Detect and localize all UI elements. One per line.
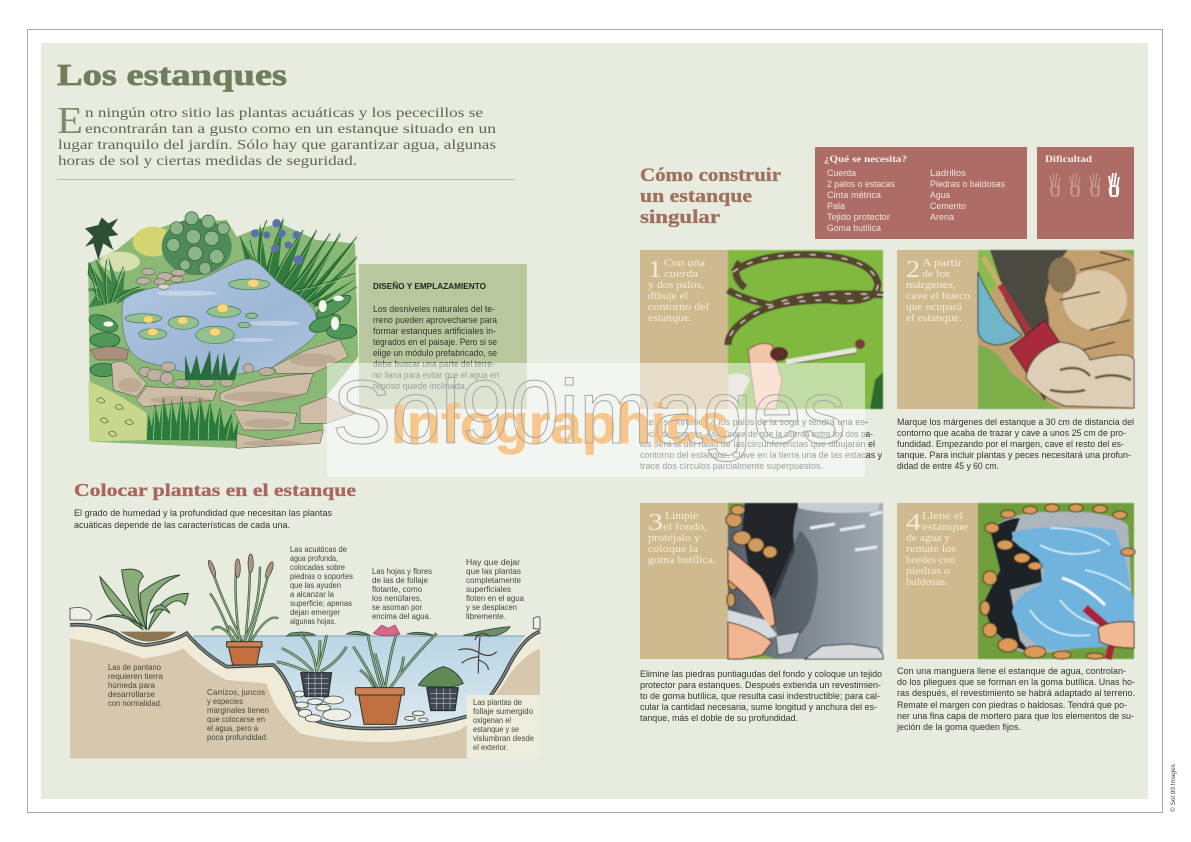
step 3 caption: tanque, más el doble de su profundidad. bbox=[640, 713, 798, 723]
label: superficiales: floten en el agua bbox=[466, 594, 525, 603]
label: aguas profundas: piedras o soportes bbox=[290, 572, 353, 581]
step 1 caption: contorno del estanque. Clave en la tierra una de las estacas y bbox=[640, 450, 882, 460]
panel: diseño y emplazamiento: formar estanques artificiales in- bbox=[373, 326, 496, 336]
plant: floating roots bbox=[458, 633, 497, 673]
panel: diseño y emplazamiento: tegrados en el paisaje. Pero si se bbox=[373, 337, 497, 347]
step 1 text: estanque. bbox=[648, 313, 692, 324]
rocks bbox=[70, 607, 540, 722]
panel: dificultad: Dificultad bbox=[1045, 155, 1093, 165]
step 1 text: dibuje el bbox=[648, 291, 688, 302]
illustration: marking the outline bbox=[728, 250, 883, 409]
label: superficiales: superficiales bbox=[466, 585, 511, 594]
step 3 caption bbox=[640, 669, 882, 723]
step 2 text: 2 bbox=[906, 257, 920, 283]
illustration: digging bbox=[978, 250, 1134, 409]
water bbox=[122, 259, 318, 375]
plant: big pot bbox=[353, 633, 437, 724]
credit: © Sol 90 Images bbox=[1170, 764, 1177, 812]
illustration: garden pond bbox=[85, 212, 358, 448]
panel: qué se necesita: Cuerda bbox=[827, 168, 856, 178]
step 1 text: Con una bbox=[664, 258, 706, 269]
step 2 text: márgenes, bbox=[906, 280, 956, 291]
label: pantano: Las de pantano bbox=[108, 663, 162, 672]
panel: qué se necesita: Tejido protector bbox=[827, 212, 890, 222]
label: marginales: marginales tienen bbox=[207, 706, 269, 715]
panel: qué se necesita bbox=[815, 147, 1027, 239]
step 1 caption: pecie de compás. Asegúrese de que la cuerda entre los dos pa- bbox=[640, 429, 873, 439]
step 2 text: cave el hueco bbox=[906, 291, 970, 302]
panel: qué se necesita: Agua bbox=[930, 190, 950, 200]
text: colocar plantas intro: El grado de humedad y la profundidad que necesitan las plantas bbox=[74, 508, 332, 518]
step 3 caption: protector para estanques. Después extienda un revestimien- bbox=[640, 680, 881, 690]
text: colocar plantas intro: acuáticas depende de las características de cada una. bbox=[74, 520, 290, 530]
label: pantano: húmeda para bbox=[108, 681, 156, 690]
step 4 caption bbox=[896, 666, 1135, 732]
step 4 text: remate los bbox=[906, 544, 956, 555]
panel: diseño y emplazamiento: Los desniveles naturales del te- bbox=[373, 304, 495, 314]
label: follaje flotante: de las de follaje bbox=[372, 576, 429, 585]
yellow shrub bbox=[88, 382, 147, 442]
step 4 caption: ner una fina capa de mortero para que los elementos de su- bbox=[897, 711, 1134, 721]
step 3 text bbox=[648, 510, 716, 566]
panel: qué se necesita: Cemento bbox=[930, 201, 966, 211]
label: sumergido: follaje sumergido bbox=[473, 707, 534, 716]
label: marginales: Carrizos, juncos bbox=[207, 688, 265, 697]
step 4 caption: jeción de la goma queden fijos. bbox=[896, 722, 1021, 732]
panel: qué se necesita: Pala bbox=[827, 201, 845, 211]
intro text: lugar tranquilo del jardín. Sólo hay que garantizar agua, algunas bbox=[58, 138, 496, 153]
step 2 text: el estanque. bbox=[906, 313, 962, 324]
calla leaves bbox=[87, 291, 357, 377]
label: pantano: con normalidad. bbox=[108, 699, 162, 708]
label: aguas profundas bbox=[290, 545, 353, 626]
step 1 text bbox=[648, 257, 709, 324]
label: aguas profundas: superficie; apenas bbox=[290, 599, 352, 608]
heading: cómo construir bbox=[640, 166, 781, 228]
dark palm bbox=[85, 217, 118, 260]
step 4 text: baldosas. bbox=[906, 577, 948, 588]
step 3 text: protéjalo y bbox=[648, 533, 700, 544]
label: pantano: desarrollarse bbox=[108, 690, 156, 699]
label: superficiales bbox=[466, 558, 525, 621]
step 2 text: A partir bbox=[922, 258, 963, 269]
step 3 text: goma butílica. bbox=[648, 555, 716, 566]
intro text: E bbox=[57, 100, 83, 142]
reeds bbox=[185, 350, 240, 380]
cross-section of pond bbox=[70, 554, 540, 758]
intro text: horas de sol y ciertas medidas de seguridad. bbox=[58, 154, 357, 169]
label: marginales: poca profundidad. bbox=[207, 733, 268, 742]
step 2 bbox=[897, 250, 1134, 471]
label: follaje flotante: se asoman por bbox=[372, 603, 422, 612]
plant: swamp bbox=[97, 569, 188, 630]
panel: diseño y emplazamiento: elige un módulo prefabricado, se bbox=[373, 348, 497, 358]
text: colocar plantas intro bbox=[74, 508, 332, 530]
grass clumps bbox=[88, 257, 147, 307]
step 4 caption: do los pliegues que se forman en la goma butílica. Unas ho- bbox=[897, 677, 1135, 687]
step 2 caption: fundidad. Empezando por el margen, cave el resto del es- bbox=[897, 439, 1124, 449]
heading: cómo construir: singular bbox=[640, 208, 720, 228]
label: sumergido: oxigenan el bbox=[473, 716, 511, 725]
step 3 text: 3 bbox=[648, 510, 663, 536]
label: superficiales: Hay que dejar bbox=[466, 558, 520, 567]
heading: cómo construir: Cómo construir bbox=[640, 166, 781, 186]
lily pads bbox=[125, 279, 270, 344]
step 3 caption: Elimine las piedras puntiagudas del fondo y coloque un tejido bbox=[640, 669, 882, 679]
label: follaje flotante: encima del agua. bbox=[372, 612, 431, 621]
illustration: laying the liner bbox=[726, 503, 883, 659]
panel: qué se necesita: Arena bbox=[930, 212, 954, 222]
step 2 caption: didad de entre 45 y 60 cm. bbox=[897, 461, 999, 471]
label: follaje flotante: flotante, como bbox=[372, 585, 423, 594]
label: follaje flotante: los nenúfares, bbox=[372, 594, 422, 603]
heading: colocar plantas: Colocar plantas en el estanque bbox=[74, 480, 356, 500]
step 2 caption: Marque los márgenes del estanque a 30 cm de distancia del bbox=[897, 417, 1134, 427]
label: pantano: requieren tierra bbox=[108, 672, 164, 681]
label: superficiales: que las plantas bbox=[466, 567, 521, 576]
panel: diseño y emplazamiento: debe buscar una parte del terre- bbox=[373, 359, 495, 369]
step 2 text: de los bbox=[922, 269, 950, 280]
label: aguas profundas: Las acuáticas de bbox=[290, 545, 348, 554]
lining bbox=[70, 625, 540, 742]
panel: diseño y emplazamiento: DISEÑO Y EMPLAZAMIENTO bbox=[373, 281, 486, 291]
step 3 text: el fondo, bbox=[663, 522, 707, 533]
step 4 text bbox=[906, 510, 969, 588]
panel: diseño y emplazamiento: reposo quede inclinada. bbox=[373, 381, 467, 391]
panel: qué se necesita: Piedras o baldosas bbox=[930, 179, 1005, 189]
label: aguas profundas: dejan emerger bbox=[290, 608, 340, 617]
label: marginales bbox=[207, 688, 269, 742]
step 1 caption bbox=[640, 417, 882, 471]
step 4 bbox=[896, 503, 1135, 732]
step 4 text: estanque bbox=[922, 522, 969, 533]
panel: diseño y emplazamiento bbox=[359, 264, 527, 409]
step 2 caption bbox=[897, 417, 1134, 471]
plant: basket right bbox=[418, 667, 463, 711]
intro text: encontrarán tan a gusto como en un estanque situado en un bbox=[85, 122, 496, 137]
step 1 caption: Ate los extremos a los palos de la soga y tendrá una es- bbox=[640, 417, 868, 427]
intro text: n ningún otro sitio las plantas acuáticas y los pececillos se bbox=[85, 106, 483, 121]
plant: reeds in pot bbox=[207, 554, 278, 665]
step 1 text: cuerda bbox=[664, 269, 699, 280]
label: sumergido bbox=[473, 698, 535, 752]
title: Los estanques bbox=[57, 57, 287, 92]
label: sumergido: el exterior. bbox=[473, 743, 508, 752]
step 1 text: contorno del bbox=[648, 302, 709, 313]
step 3 caption: to de goma butílica, que resulta casi indestructible; para cal- bbox=[640, 691, 880, 701]
step 1 caption: los será la del radio de las circunferencias que dibujarán el bbox=[640, 439, 875, 449]
step 3 text: coloque la bbox=[648, 544, 699, 555]
step 3 bbox=[640, 503, 883, 723]
watermark: Infographics bbox=[391, 392, 729, 455]
step 3 caption: cular la cantidad necesaria, sume longitud y anchura del es- bbox=[640, 702, 877, 712]
label: aguas profundas: que las ayuden bbox=[290, 581, 341, 590]
panel: qué se necesita: Goma butílica bbox=[827, 223, 881, 233]
step 2 caption: tanque. Para incluir plantas y peces necesitará una profun- bbox=[897, 450, 1131, 460]
step 1 caption: trace dos círculos parcialmente superpuestos. bbox=[640, 461, 823, 471]
soil bbox=[70, 638, 540, 758]
icon: difficulty hands bbox=[1050, 173, 1119, 196]
label: superficiales: y se desplacen bbox=[466, 603, 517, 612]
step 4 caption: Remate el margen con piedras o baldosas. Tendrá que po- bbox=[897, 700, 1127, 710]
step 4 caption: Con una manguera llene el estanque de agua, controlan- bbox=[897, 666, 1126, 676]
step 1 text: y dos palos, bbox=[648, 280, 704, 291]
label: sumergido: estanque y se bbox=[473, 725, 520, 734]
step 2 text bbox=[906, 257, 970, 324]
label: aguas profundas: a alcanzar la bbox=[290, 590, 335, 599]
step 4 text: piedras o bbox=[906, 566, 950, 577]
step 4 caption: ras después, el revestimiento se habrá adaptado al terreno. bbox=[897, 688, 1135, 698]
step 3 text: Limpie bbox=[665, 511, 699, 522]
panel: diseño y emplazamiento: no llana para evitar que el agua en bbox=[373, 370, 499, 380]
label: superficiales: libremente. bbox=[466, 612, 506, 621]
watermark: Sol90images bbox=[332, 363, 846, 463]
stones bbox=[90, 268, 357, 448]
label: marginales: y especies bbox=[207, 697, 243, 706]
heading: cómo construir: un estanque bbox=[640, 187, 752, 207]
label: pantano bbox=[108, 663, 164, 708]
panel: dificultad bbox=[1037, 147, 1134, 239]
label: marginales: el agua, pero a bbox=[207, 724, 259, 733]
step 1 text: 1 bbox=[648, 257, 662, 283]
bottom grass bbox=[147, 395, 238, 441]
label: superficiales: completamente bbox=[466, 576, 522, 585]
label: follaje flotante bbox=[372, 567, 432, 621]
panel: qué se necesita: ¿Qué se necesita? bbox=[824, 155, 907, 165]
cross-section labels bbox=[108, 545, 535, 752]
exterior text backing bbox=[467, 695, 540, 758]
label: aguas profundas: colocadas sobre bbox=[290, 563, 346, 572]
illustration: filling with water bbox=[978, 503, 1135, 659]
step 2 caption: contorno que acaba de trazar y cave a unos 25 cm de pro- bbox=[897, 428, 1126, 438]
label: sumergido: Las plantas de bbox=[473, 698, 523, 707]
stone shading bbox=[118, 353, 337, 447]
water bbox=[193, 636, 525, 728]
panel: qué se necesita: Cinta métrica bbox=[827, 190, 881, 200]
plant: floating lily bbox=[287, 625, 510, 636]
step 4 text: de agua y bbox=[906, 533, 950, 544]
step 4 text: bordes con bbox=[906, 555, 955, 566]
plant: basket left bbox=[277, 633, 347, 697]
step 1 bbox=[640, 250, 883, 471]
label: aguas profundas: agua profunda, bbox=[290, 554, 338, 563]
panel: diseño y emplazamiento: rreno pueden aprovecharse para bbox=[373, 315, 497, 325]
label: aguas profundas: algunas hojas. bbox=[290, 617, 336, 626]
panel: qué se necesita: 2 palos o estacas bbox=[827, 179, 895, 189]
step 4 text: Llene el bbox=[922, 511, 963, 522]
label: follaje flotante: Las hojas y flores bbox=[372, 567, 432, 576]
label: marginales: que colocarse en bbox=[207, 715, 265, 724]
intro text bbox=[57, 100, 496, 169]
step 2 text: que ocupará bbox=[906, 302, 963, 313]
step 4 text: 4 bbox=[906, 510, 921, 536]
label: sumergido: vislumbran desde bbox=[473, 734, 535, 743]
irises bbox=[251, 219, 303, 265]
panel: qué se necesita: Ladrillos bbox=[930, 168, 967, 178]
